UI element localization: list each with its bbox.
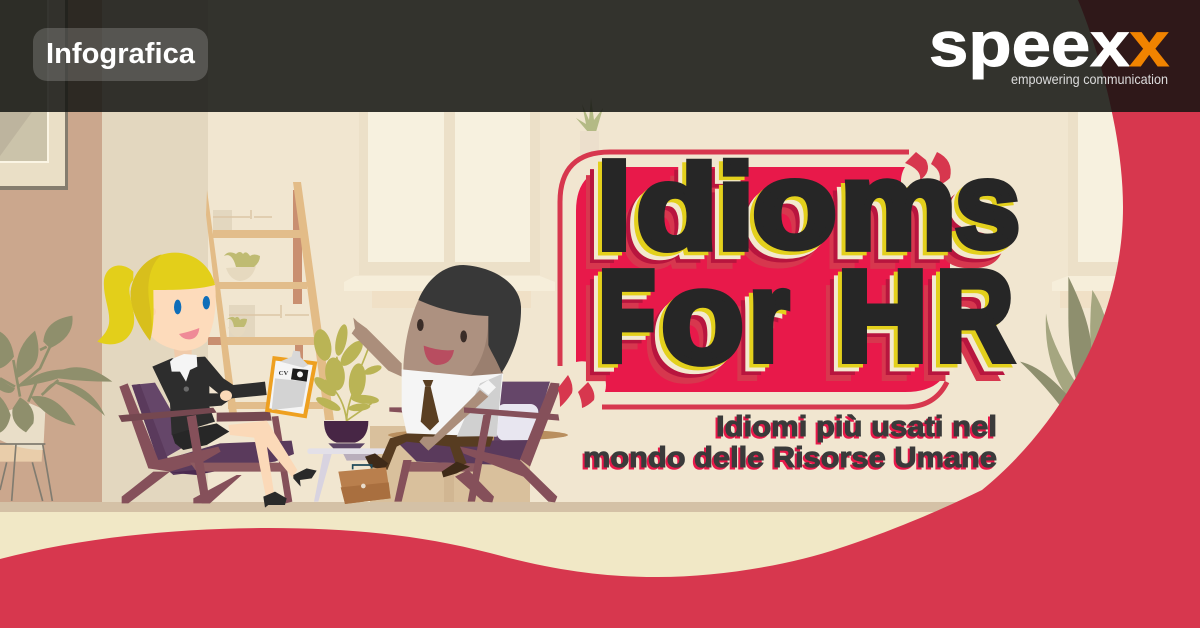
head xyxy=(403,300,503,377)
title letters: i xyxy=(717,139,754,274)
title shadow light red: s xyxy=(939,155,1004,290)
title shadow dark red: F xyxy=(588,257,642,398)
saucer xyxy=(328,443,365,448)
title shadow yellow: o xyxy=(748,140,833,277)
title shadow yellow: R xyxy=(932,248,1010,392)
right plant xyxy=(1020,277,1108,410)
title letters: s xyxy=(955,138,1020,273)
badge: Infografica: Infografica xyxy=(46,38,196,70)
title shadow yellow: s xyxy=(951,142,1016,277)
title shadow dark red: o xyxy=(740,148,825,284)
title shadow yellow: d xyxy=(632,144,713,278)
title shadow dark red: H xyxy=(825,256,916,400)
title letters: m xyxy=(840,138,956,276)
wall shelves ladder xyxy=(206,182,334,421)
hand xyxy=(209,386,218,393)
hair xyxy=(131,253,215,341)
jacket xyxy=(152,357,267,435)
title shadow dark red: i xyxy=(705,150,742,285)
man xyxy=(338,265,559,504)
title shadow light red: o xyxy=(736,154,821,290)
lower quotation marks xyxy=(558,375,594,408)
title shadow light red: R xyxy=(920,261,998,406)
eye right xyxy=(460,330,467,342)
head xyxy=(152,283,216,351)
title shadow light red: i xyxy=(701,156,738,291)
neck xyxy=(173,345,192,363)
ponytail xyxy=(97,265,134,344)
hair xyxy=(418,265,521,373)
pot xyxy=(324,421,368,443)
leaves xyxy=(311,323,383,422)
title letters: r xyxy=(749,245,789,388)
title shadow cream: o xyxy=(653,252,736,398)
bubble fill xyxy=(576,167,950,392)
subtitle xyxy=(581,411,997,476)
title shadow cream: d xyxy=(628,148,709,281)
title shadow cream: I xyxy=(589,142,623,283)
woman's chair arm and leg xyxy=(118,408,217,503)
logo: speexx: speex x xyxy=(929,10,1169,80)
woman's chair back xyxy=(119,383,294,503)
window right xyxy=(1052,112,1200,308)
mouth xyxy=(179,328,199,339)
eye right xyxy=(203,296,210,309)
title shadow light red: o xyxy=(645,262,728,407)
window centre xyxy=(344,112,555,308)
title shadow cream: i xyxy=(709,147,746,281)
briefcase xyxy=(338,465,391,504)
title shadow cream xyxy=(589,142,1012,398)
title shadow dark red: d xyxy=(624,152,705,285)
title letters: o xyxy=(661,245,744,390)
title shadow light red: m xyxy=(824,155,940,293)
title shadow cream: F xyxy=(592,254,646,394)
shirt xyxy=(402,369,503,437)
raised arm xyxy=(352,318,402,377)
jacket button xyxy=(184,386,189,392)
title shadow cream: m xyxy=(832,145,948,283)
title shadow yellow: m xyxy=(836,141,952,279)
title letters: d xyxy=(636,141,717,274)
title shadow yellow: o xyxy=(657,249,740,394)
tie xyxy=(421,380,439,431)
hair shadow xyxy=(131,254,162,341)
title letters: o xyxy=(752,137,837,273)
title shadow light red: F xyxy=(584,263,638,404)
title: Idioms For HR xyxy=(581,135,1020,407)
hand right xyxy=(220,390,232,401)
title shadow cream: s xyxy=(947,145,1012,281)
title shadow light red: d xyxy=(620,158,701,291)
blouse collar xyxy=(170,354,197,382)
shoe left xyxy=(263,492,287,508)
title shadow yellow: F xyxy=(596,250,650,390)
title letters: R xyxy=(936,244,1014,389)
trousers xyxy=(378,433,493,470)
floor xyxy=(0,502,1200,628)
shelf succulent lower xyxy=(226,317,247,337)
boxes behind man xyxy=(370,426,530,502)
title shadow light red: I xyxy=(581,152,615,293)
speech bubble xyxy=(558,152,951,408)
subtitle line 2: mondo delle Risorse Umane xyxy=(581,444,995,476)
title shadow dark red: o xyxy=(649,256,732,401)
title shadow dark red: R xyxy=(924,255,1002,400)
mouth xyxy=(424,346,454,365)
title shadow dark red: s xyxy=(943,149,1008,284)
shelf succulent upper xyxy=(224,252,260,281)
title letters: H xyxy=(837,245,928,389)
title shadow yellow xyxy=(593,138,1016,394)
man's chair front xyxy=(460,383,559,502)
title shadow dark red: m xyxy=(828,149,944,287)
title letters: F xyxy=(600,246,654,387)
plant with pot and side table xyxy=(307,323,387,502)
brown table behind man's chair xyxy=(388,429,568,441)
CV label: CV xyxy=(279,370,288,377)
title shadow cream: H xyxy=(829,252,920,396)
badge: Infografica xyxy=(33,28,208,81)
header band xyxy=(0,0,1200,112)
title shadow yellow: r xyxy=(745,248,785,392)
ear xyxy=(487,336,497,346)
bubble outline xyxy=(560,152,947,407)
title shadow dark red xyxy=(585,146,1008,401)
woman xyxy=(97,253,317,508)
legs xyxy=(228,421,297,496)
title shadow dark red: r xyxy=(737,256,777,399)
title shadow light red: r xyxy=(733,262,773,405)
sleeve patch xyxy=(478,380,496,395)
eye left xyxy=(174,300,181,314)
title shadow light red: H xyxy=(821,262,912,406)
title shadow yellow: i xyxy=(713,143,750,278)
shoes xyxy=(365,453,470,477)
ear xyxy=(147,307,156,316)
title shadow dark red: I xyxy=(585,146,619,287)
side table xyxy=(307,448,387,502)
subtitle line 2: mondo delle Risorse Umane xyxy=(583,442,997,474)
title shadow cream: R xyxy=(928,252,1006,396)
subtitle line 1: Idiomi più usati nel xyxy=(714,413,995,445)
shirt shadow xyxy=(457,374,502,437)
upper quotation marks xyxy=(905,152,951,186)
title shadow cream: r xyxy=(741,252,781,395)
clipboard xyxy=(265,351,317,418)
left plant and stand xyxy=(0,316,112,501)
man's chair back xyxy=(389,382,550,502)
title shadow cream: o xyxy=(744,144,829,280)
title shadow yellow: H xyxy=(833,248,924,392)
head shadow xyxy=(470,316,503,377)
eye left xyxy=(417,319,424,331)
small plant on shelf xyxy=(576,98,603,155)
title letters: I xyxy=(597,135,631,276)
title shadow light red xyxy=(581,152,1004,407)
subtitle line 1: Idiomi più usati nel xyxy=(716,411,997,443)
logo: speexx: empowering communication xyxy=(1011,71,1168,87)
title letters xyxy=(597,135,1020,390)
skirt xyxy=(172,423,229,450)
title shadow yellow: I xyxy=(593,138,627,280)
arm xyxy=(419,390,488,451)
shoe right xyxy=(293,468,317,487)
